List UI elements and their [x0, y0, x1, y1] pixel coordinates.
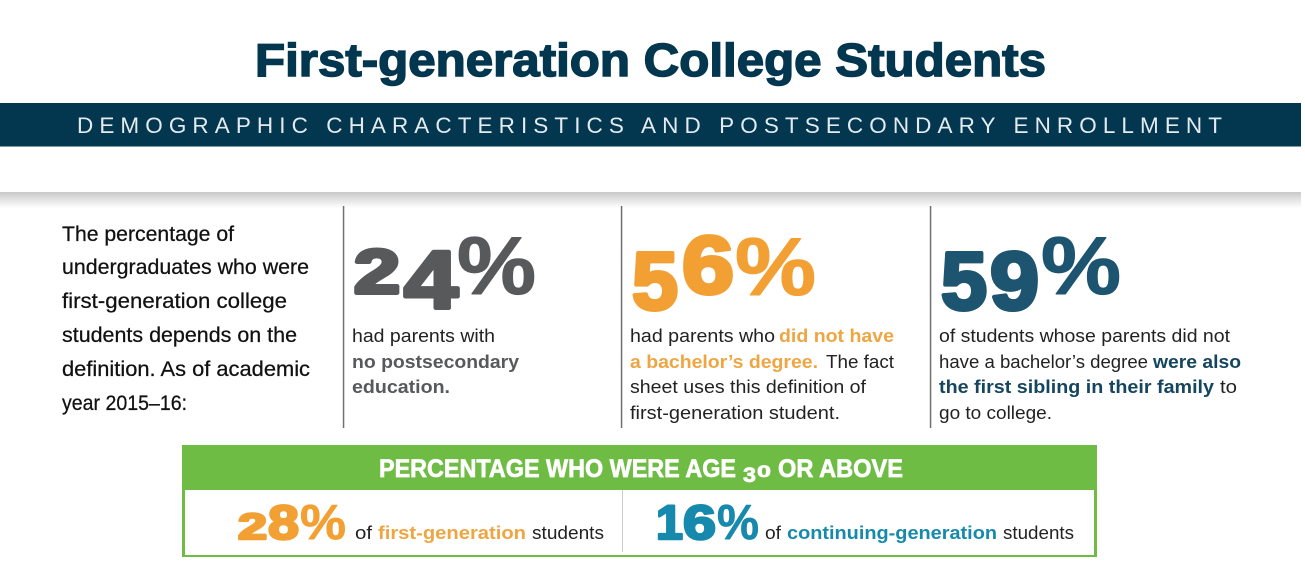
- text: first-generation: first-generation: [378, 523, 526, 543]
- text: first-generation: of: [355, 523, 373, 543]
- text: 56% description: The fact: [826, 352, 894, 372]
- text: 24% description: no postsecondary: [352, 352, 519, 372]
- text: 24% description: education.: [352, 377, 450, 397]
- text: 56% description: did not have: [779, 326, 894, 346]
- text: continuing-generation: continuing-generation: [787, 523, 997, 543]
- subtitle banner: [0, 103, 1301, 146]
- intro text: [62, 223, 310, 415]
- text: 59% description: go to college.: [939, 403, 1052, 423]
- stat: 56%: 6: [682, 220, 734, 311]
- text: continuing-generation: [765, 523, 1074, 543]
- text: 56% description: a bachelor’s degree.: [630, 352, 818, 372]
- text: 59% description: [939, 326, 1241, 423]
- text: 59% description: have a bachelor’s degree: [939, 352, 1148, 372]
- stat: 28%: 2: [238, 506, 267, 547]
- stat: 56%: [632, 220, 816, 327]
- panel frame: [182, 445, 1097, 557]
- intro text: students depends on the: [62, 324, 297, 347]
- stat: 28%: %: [300, 496, 346, 550]
- text: 59% description: to: [1220, 377, 1237, 397]
- panel body: [185, 490, 1094, 555]
- stat: 24%: [354, 221, 536, 326]
- text: 59% description: were also: [1152, 352, 1241, 372]
- text: 56% description: sheet uses this definition of: [630, 377, 867, 397]
- text: 59% description: the first sibling in their family: [939, 377, 1214, 397]
- text: continuing-generation: students: [1003, 523, 1074, 543]
- stat: 28%: [238, 496, 346, 550]
- column divider 3: [930, 206, 931, 428]
- text: 24% description: had parents with: [352, 326, 495, 346]
- text: 56% description: had parents who: [630, 326, 775, 346]
- stat: 59%: [941, 221, 1121, 327]
- stat: 16%: 6: [683, 497, 716, 550]
- text: 59% description: of students whose parents did not: [939, 326, 1230, 346]
- stat: 56%: %: [735, 222, 816, 313]
- intro text: undergraduates who were: [62, 256, 309, 279]
- intro text: The percentage of: [62, 223, 234, 246]
- stat: 56%: 5: [632, 236, 678, 327]
- stat: 16%: %: [717, 496, 759, 550]
- stat: 24%: 2: [354, 238, 400, 307]
- stat: 59%: 9: [990, 236, 1039, 327]
- text: first-generation: [355, 523, 604, 543]
- stat: 16%: [656, 496, 759, 550]
- stat: 24%: %: [457, 221, 536, 312]
- text: 56% description: [630, 326, 894, 423]
- panel heading: PERCENTAGE WHO WERE AGE: [379, 455, 736, 483]
- stat: 24%: 4: [404, 235, 458, 326]
- intro text: first-generation college: [62, 290, 287, 313]
- stat: 16%: 1: [656, 497, 683, 550]
- shadow band: [0, 192, 1301, 208]
- text: 24% description: [352, 326, 519, 397]
- column divider 2: [621, 206, 622, 428]
- panel divider: [622, 490, 623, 552]
- intro text: year 2015–16:: [62, 392, 187, 415]
- subtitle banner: DEMOGRAPHIC CHARACTERISTICS AND POSTSECONDARY ENROLLMENT: [77, 113, 1222, 138]
- stat: 59%: 5: [941, 236, 987, 327]
- column divider 1: [343, 206, 344, 428]
- stat: 28%: 8: [268, 497, 299, 550]
- intro text: definition. As of academic: [62, 358, 310, 381]
- panel heading: 0: [757, 462, 771, 481]
- text: continuing-generation: of: [765, 523, 782, 543]
- panel heading: 3: [743, 464, 756, 487]
- text: first-generation: students: [532, 523, 604, 543]
- text: 56% description: first-generation student.: [630, 403, 840, 423]
- title: First-generation College Students: [255, 34, 1046, 86]
- stat: 59%: %: [1041, 221, 1121, 312]
- panel: age 30 or above: [182, 445, 1097, 557]
- panel heading: OR ABOVE: [778, 455, 903, 483]
- panel heading: [379, 455, 903, 487]
